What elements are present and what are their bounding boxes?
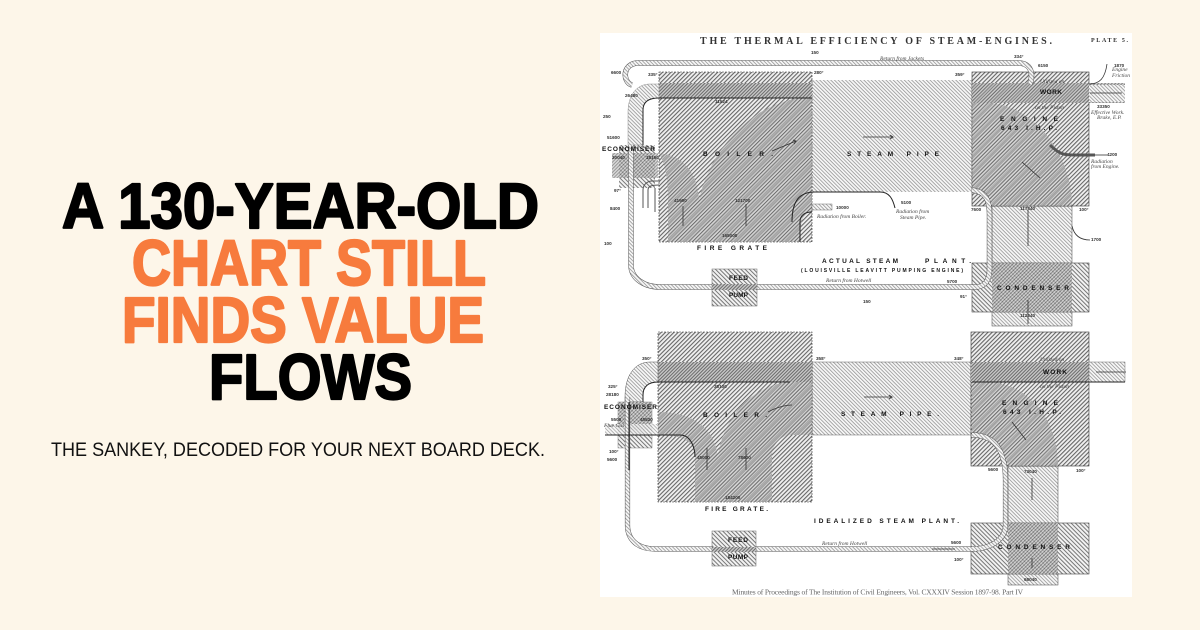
flow values: 100° xyxy=(1076,468,1086,473)
condenser block xyxy=(971,523,1089,574)
flow values: 11524 xyxy=(715,99,728,104)
flow values: 33350 xyxy=(1097,104,1110,109)
headline xyxy=(62,170,539,413)
economizer block xyxy=(619,145,655,188)
flow values xyxy=(606,356,1086,582)
engine block xyxy=(971,332,1089,466)
block labels: 643 I.H.P. xyxy=(1001,125,1057,132)
economizer block xyxy=(618,402,652,448)
italic annotations: Effective Work. xyxy=(1090,109,1124,116)
block labels: ECONOMISER xyxy=(604,404,657,411)
block labels: PUMP xyxy=(729,292,749,299)
flow values: 30040 xyxy=(612,155,625,160)
flow values: 18160 xyxy=(646,155,659,160)
flow values: 150 xyxy=(863,299,871,304)
flow values: 184200 xyxy=(725,495,741,500)
engine flow xyxy=(972,382,1058,466)
boiler block xyxy=(658,332,812,502)
italic annotations: Return from Hotwell xyxy=(821,540,868,547)
flow values: 150 xyxy=(811,50,819,55)
flow values: 359° xyxy=(955,72,965,77)
flow values: 1870 xyxy=(1114,63,1125,68)
flow arrows xyxy=(683,93,1122,324)
block labels: CONDENSER xyxy=(998,544,1070,551)
flow values: 6150 xyxy=(1038,63,1049,68)
flow values: 348° xyxy=(954,356,964,361)
panel: historic Sankey plate xyxy=(600,33,1132,597)
italic annotations: Return from Hotwell xyxy=(825,277,872,284)
flow values: 78600 xyxy=(738,455,751,460)
block labels: IDEALIZED STEAM PLANT. xyxy=(814,518,959,525)
flow values: 6600 xyxy=(611,70,622,75)
flow values: 8400 xyxy=(610,206,621,211)
block labels: WORK xyxy=(1043,369,1067,376)
economizer overlap xyxy=(618,402,652,430)
flow values: 5600 xyxy=(607,457,618,462)
boiler flow from grate xyxy=(658,382,812,502)
flow values: 26480 xyxy=(625,93,638,98)
steam pipe block xyxy=(812,80,972,192)
flow values: 165000 xyxy=(722,233,738,238)
flow values: 7600 xyxy=(971,207,982,212)
flue gas band xyxy=(612,153,658,178)
flow values: 121700 xyxy=(735,198,751,203)
flow values: 68040 xyxy=(1024,577,1037,582)
boiler flow from grate xyxy=(658,98,812,242)
economizer feed loops xyxy=(643,181,659,212)
flow values: 117840 xyxy=(1020,206,1036,211)
italic annotations xyxy=(603,357,1069,547)
work band xyxy=(971,362,1089,382)
flow values: 5600 xyxy=(988,467,999,472)
condensate leak branch xyxy=(1072,226,1090,240)
radiation from engine xyxy=(1050,145,1107,155)
block labels: FIRE GRATE. xyxy=(705,506,768,513)
inner feed curve xyxy=(643,98,812,145)
block labels xyxy=(604,369,1070,561)
block labels: (LOUISVILLE LEAVITT PUMPING ENGINE) xyxy=(801,268,963,274)
flow values: 335° xyxy=(648,72,658,77)
condenser overlap xyxy=(1008,523,1058,574)
block labels: BOILER. xyxy=(703,151,773,158)
flow values: 358° xyxy=(816,356,826,361)
source caption: Minutes of Proceedings of The Institution of Civil Engineers, Vol. CXXXIV Session 1897-98. Part IV xyxy=(732,588,1024,596)
steam pipe block xyxy=(812,362,972,435)
flow values: 10000 xyxy=(836,205,849,210)
block labels: CONDENSER xyxy=(997,285,1069,292)
italic annotations: Radiation from xyxy=(895,208,929,215)
flow values: 1700 xyxy=(1091,237,1102,242)
flow values: 250 xyxy=(603,114,611,119)
feed pump return band xyxy=(712,284,757,290)
block labels: ECONOMISER xyxy=(602,146,655,153)
boiler steam band xyxy=(658,362,812,382)
plate title: THE THERMAL EFFICIENCY OF STEAM-ENGINES. xyxy=(700,36,1052,47)
flow values: 5100 xyxy=(901,200,912,205)
flue gas band xyxy=(605,424,658,435)
flow values: 280° xyxy=(814,70,824,75)
flow values: 73040 xyxy=(1024,469,1037,474)
work band xyxy=(972,83,1125,103)
flow values: 100° xyxy=(954,557,964,562)
flow values: 325° xyxy=(608,384,618,389)
italic annotations: Engine xyxy=(1111,67,1128,73)
engine block xyxy=(972,72,1089,206)
flow values: 5500 xyxy=(611,417,622,422)
plate background xyxy=(600,33,1132,597)
flow values: 91° xyxy=(960,294,967,299)
block labels xyxy=(602,89,1069,299)
italic annotations: Friction xyxy=(1111,73,1130,79)
return from hotwell loop xyxy=(628,397,1006,549)
block labels: FEED xyxy=(728,537,748,544)
feed pump xyxy=(712,531,756,566)
headline line 1: A 130-YEAR-OLD xyxy=(62,170,539,242)
block labels: FEED xyxy=(729,275,748,282)
plate number: PLATE 5. xyxy=(1091,38,1128,44)
italic annotations: Steam Pipe. xyxy=(900,215,926,221)
boiler feed band xyxy=(628,84,659,145)
headline line 3: FINDS VALUE xyxy=(122,284,484,356)
flow values: 28180 xyxy=(606,392,619,397)
feed heating band xyxy=(625,362,658,402)
italic annotations: Brake, E.P. xyxy=(1097,115,1122,121)
italic annotations: Flue Gas xyxy=(603,423,624,429)
flow values: 112340 xyxy=(1020,313,1036,318)
block labels: FIRE GRATE xyxy=(697,245,768,252)
flow arrows xyxy=(707,372,1126,568)
headline line 2: CHART STILL xyxy=(132,227,486,299)
flow values: 41900 xyxy=(674,198,687,203)
block labels: WORK xyxy=(1040,89,1062,96)
condenser overlap xyxy=(992,263,1072,312)
subtitle: THE SANKEY, DECODED FOR YOUR NEXT BOARD DECK. xyxy=(51,440,545,461)
italic annotations: Radiation xyxy=(1090,159,1113,165)
block labels: PUMP xyxy=(728,554,749,561)
flow values: 45520 xyxy=(640,417,653,422)
flow values: 100° xyxy=(1079,207,1089,212)
diagram: actual steam plant xyxy=(602,50,1130,326)
flow values: 51600 xyxy=(607,135,620,140)
block labels: ENGINE xyxy=(1000,116,1059,123)
feed pump return band xyxy=(712,547,756,552)
italic annotations: Utilized on xyxy=(1040,79,1065,85)
return from jackets loop xyxy=(625,63,1032,85)
boiler feed loop xyxy=(631,145,990,287)
flow values: 100 xyxy=(604,241,612,246)
flow values: 100° xyxy=(609,449,619,454)
italic annotations xyxy=(816,55,1130,284)
block labels: STEAM PIPE xyxy=(847,151,940,158)
flow values: 350° xyxy=(642,356,652,361)
engine friction branch xyxy=(1089,64,1107,84)
italic annotations: Utilized on xyxy=(1040,357,1065,363)
boiler block xyxy=(659,72,812,242)
block labels: PLANT. xyxy=(925,258,971,265)
italic annotations: on the Piston xyxy=(1040,384,1069,390)
boiler and engine outlines xyxy=(605,382,1125,470)
feed pump xyxy=(712,269,757,306)
block labels: ENGINE xyxy=(1002,400,1059,407)
condenser block xyxy=(972,263,1089,312)
flow values: 5700 xyxy=(947,279,958,284)
block labels: STEAM PIPE. xyxy=(841,411,939,418)
diagram: idealized steam plant xyxy=(603,332,1126,585)
headline line 4: FLOWS xyxy=(209,341,412,413)
flow values: 45000 xyxy=(697,455,710,460)
work output extension xyxy=(1089,85,1125,102)
work output extension xyxy=(1089,362,1125,382)
block labels: 643 I.H.P. xyxy=(1003,409,1061,416)
flow values: 5600 xyxy=(951,540,962,545)
italic annotations: Return from Jackets xyxy=(879,55,924,62)
flow values: 38100 xyxy=(714,384,727,389)
block labels: ACTUAL STEAM xyxy=(822,258,898,265)
engine flow xyxy=(972,103,1072,206)
italic annotations: on the Piston xyxy=(1035,105,1064,111)
flow values xyxy=(603,50,1125,318)
italic annotations: Radiation from Boiler. xyxy=(816,213,866,220)
flow values: 97° xyxy=(614,188,621,193)
exhaust to condenser xyxy=(1008,466,1058,585)
flow values: 4200 xyxy=(1107,152,1118,157)
italic annotations: from Engine. xyxy=(1091,163,1120,170)
flow values: 334° xyxy=(1014,54,1024,59)
boiler steam band xyxy=(659,83,812,98)
block labels: BOILER. xyxy=(703,412,767,419)
engine exhaust to condenser xyxy=(992,206,1072,326)
radiation from boiler xyxy=(792,192,895,242)
